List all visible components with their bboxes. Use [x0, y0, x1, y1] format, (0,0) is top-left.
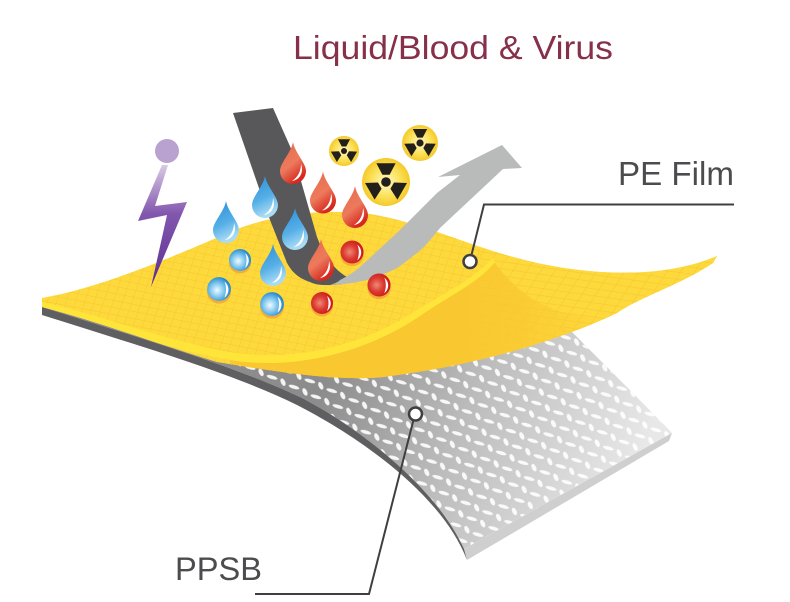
icon: lightning bolt	[138, 139, 187, 287]
icon: blood drop 4	[308, 239, 334, 281]
icon: needle dark shaft	[233, 108, 347, 285]
icon: water bead 2	[207, 277, 231, 304]
PPSB right side edge	[464, 433, 672, 560]
icon: water drop 2	[213, 201, 239, 243]
panel: PPSB gray fabric layer	[42, 307, 672, 560]
icon: blood bead 3	[311, 292, 333, 316]
callout: PE Film	[464, 155, 734, 268]
callout: PE Film: PE Film	[618, 155, 734, 192]
icon: water bead 1	[229, 249, 251, 274]
icon: blood drop 1	[280, 142, 306, 184]
icon: water drop 1	[252, 176, 278, 218]
icon: radiation small right	[402, 125, 438, 161]
icon: blood bead 2	[367, 273, 391, 299]
callout: PPSB: PPSB	[175, 551, 262, 587]
icon: blood drop 2	[310, 172, 336, 214]
icon: radiation small left	[329, 136, 359, 166]
icon: gray deflection arrow	[330, 145, 522, 285]
icon: water bead 3	[260, 292, 284, 319]
PPSB dark curved edge	[42, 307, 467, 560]
icon: radiation large	[362, 158, 410, 206]
icon: water drop 4	[260, 244, 286, 286]
callout: PPSB	[175, 408, 422, 594]
panel: PE film yellow layer	[42, 212, 717, 378]
PPSB top surface with perforations	[42, 307, 672, 549]
PE film grid surface	[42, 212, 717, 378]
title: Liquid/Blood & Virus	[293, 29, 613, 66]
icon: water drop 3	[282, 208, 308, 250]
icon: blood bead 1	[340, 240, 364, 266]
icon: blood drop 3	[342, 186, 368, 228]
